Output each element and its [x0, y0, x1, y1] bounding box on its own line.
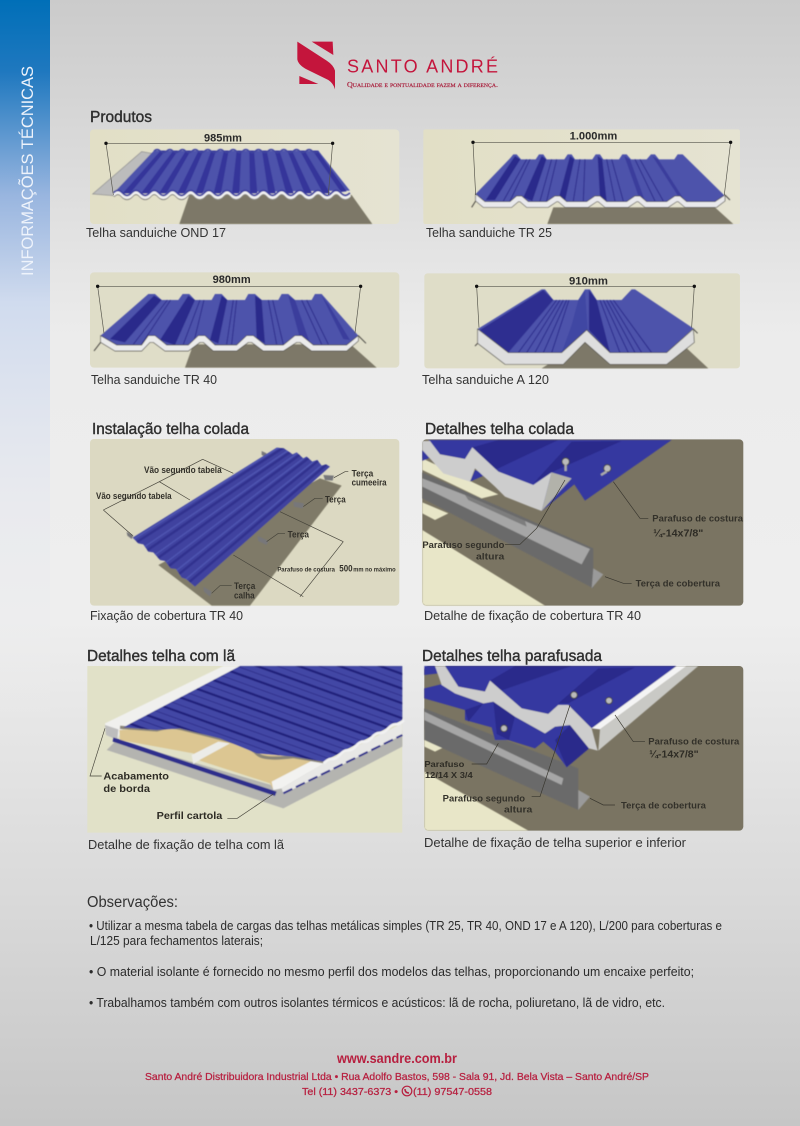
caption: detalhe TR 40: Detalhe de fixação de cobertura TR 40 — [424, 609, 641, 623]
label: parafuso segundo: Parafuso segundo — [443, 794, 526, 804]
panel: TR 25 diagram — [423, 129, 740, 224]
label: medida do parafuso: ¼-14x7/8" — [653, 529, 704, 540]
caption: A 120: Telha sanduiche A 120 — [422, 373, 549, 387]
heading: Detalhes telha parafusada: Detalhes telha parafusada — [422, 648, 602, 665]
icon: whatsapp — [402, 1086, 412, 1096]
label: terça de cobertura: Terça de cobertura — [636, 579, 721, 589]
panel: A 120 diagram — [424, 273, 740, 368]
label: cumeeira: cumeeira — [352, 478, 388, 488]
note 1: • Utilizar a mesma tabela de cargas das telhas metálicas simples (TR 25, TR 40, OND 17 e A 120), L/200 para coberturas e — [89, 919, 722, 933]
label: vão superior: Vão segundo tabela — [144, 465, 223, 475]
logo: Santo André — [297, 42, 498, 89]
caption: TR 25: Telha sanduiche TR 25 — [426, 226, 552, 240]
label: parafuso: Parafuso — [424, 759, 464, 769]
heading: Detalhes telha com lã: Detalhes telha com lã — [87, 648, 235, 665]
heading: Produtos: Produtos — [90, 109, 152, 126]
label: terça central: Terça — [288, 530, 310, 540]
panel: screwed tile detail — [424, 666, 743, 831]
heading: observações: Observações: — [87, 894, 178, 911]
brand name: SANTO ANDRÉ — [347, 56, 498, 76]
note 2: • O material isolante é fornecido no mesmo perfil dos modelos das telhas, proporcionando um encaixe perfeito; — [89, 965, 694, 979]
panel: wool tile detail — [87, 665, 404, 832]
caption: OND 17: Telha sanduiche OND 17 — [86, 226, 226, 240]
label: parafuso segundo altura: Parafuso segundo — [422, 540, 505, 550]
label: parafuso de costura: Parafuso de costura — [648, 737, 740, 747]
address: Santo André Distribuidora Industrial Ltda • Rua Adolfo Bastos, 598 - Sala 91, Jd. Bela Vista – Santo André/SP — [145, 1071, 649, 1083]
telephone: Tel (11) 3437-6373 • — [302, 1086, 398, 1098]
text block: observações — [87, 894, 722, 1010]
note 1 continuation: L/125 para fechamentos laterais; — [90, 934, 263, 948]
website: www.sandre.com.br — [336, 1051, 458, 1066]
label: parafuso de costura: Parafuso de costura — [277, 567, 336, 573]
label: 12/14 x 3/4: 12/14 X 3/4 — [425, 770, 473, 780]
panel: installation diagram — [90, 439, 399, 606]
label: terça: Terça — [325, 494, 347, 504]
heading: Instalação telha colada: Instalação telha colada — [92, 421, 249, 438]
dimension label: 1.000mm — [570, 130, 618, 142]
panel: detail bonded tile — [422, 439, 744, 606]
tagline: Qualidade e pontualidade fazem a diferença. — [347, 81, 498, 89]
label: 500 mm: 500 — [339, 564, 353, 574]
heading: Detalhes telha colada: Detalhes telha colada — [425, 421, 574, 438]
footer: contact — [145, 1051, 649, 1098]
note 3: • Trabalhamos também com outros isolantes térmicos e acústicos: lã de rocha, poliuretano, lã de vidro, etc. — [89, 996, 665, 1010]
label: terça calha: Terça — [234, 581, 256, 591]
label: acabamento: Acabamento — [103, 771, 169, 782]
dimension label: 985mm — [204, 133, 242, 145]
caption: TR 40: Telha sanduiche TR 40 — [91, 373, 217, 387]
caption: detalhe superior e inferior: Detalhe de fixação de telha superior e inferior — [424, 836, 686, 850]
label: no máximo: mm no máximo — [353, 567, 396, 573]
label: altura: altura — [476, 551, 505, 561]
label: medida do parafuso: ¼-14x7/8" — [649, 750, 699, 761]
label: terça de cobertura: Terça de cobertura — [621, 800, 707, 810]
label: de borda: de borda — [103, 784, 151, 795]
dimension label: 910mm — [569, 275, 608, 287]
whatsapp number: (11) 97547-0558 — [413, 1086, 492, 1098]
label: parafuso de costura: Parafuso de costura — [652, 514, 744, 524]
caption: detalhe lã: Detalhe de fixação de telha com lã — [88, 838, 284, 852]
sidebar: informações técnicas — [0, 0, 50, 720]
caption: fixação TR 40: Fixação de cobertura TR 40 — [90, 609, 243, 623]
dimension label: 980mm — [213, 274, 251, 286]
panel: TR 40 diagram — [90, 272, 399, 368]
label: calha: calha — [234, 590, 256, 600]
label: perfil cartola: Perfil cartola — [157, 811, 223, 822]
label: terça cumeeira: Terça — [352, 468, 374, 478]
panel: OND 17 diagram — [90, 129, 399, 224]
icon: S mark — [297, 42, 335, 89]
label: altura: altura — [504, 804, 533, 814]
label: vão inferior: Vão segundo tabela — [96, 491, 173, 501]
sidebar label: INFORMAÇÕES TÉCNICAS — [18, 66, 37, 276]
